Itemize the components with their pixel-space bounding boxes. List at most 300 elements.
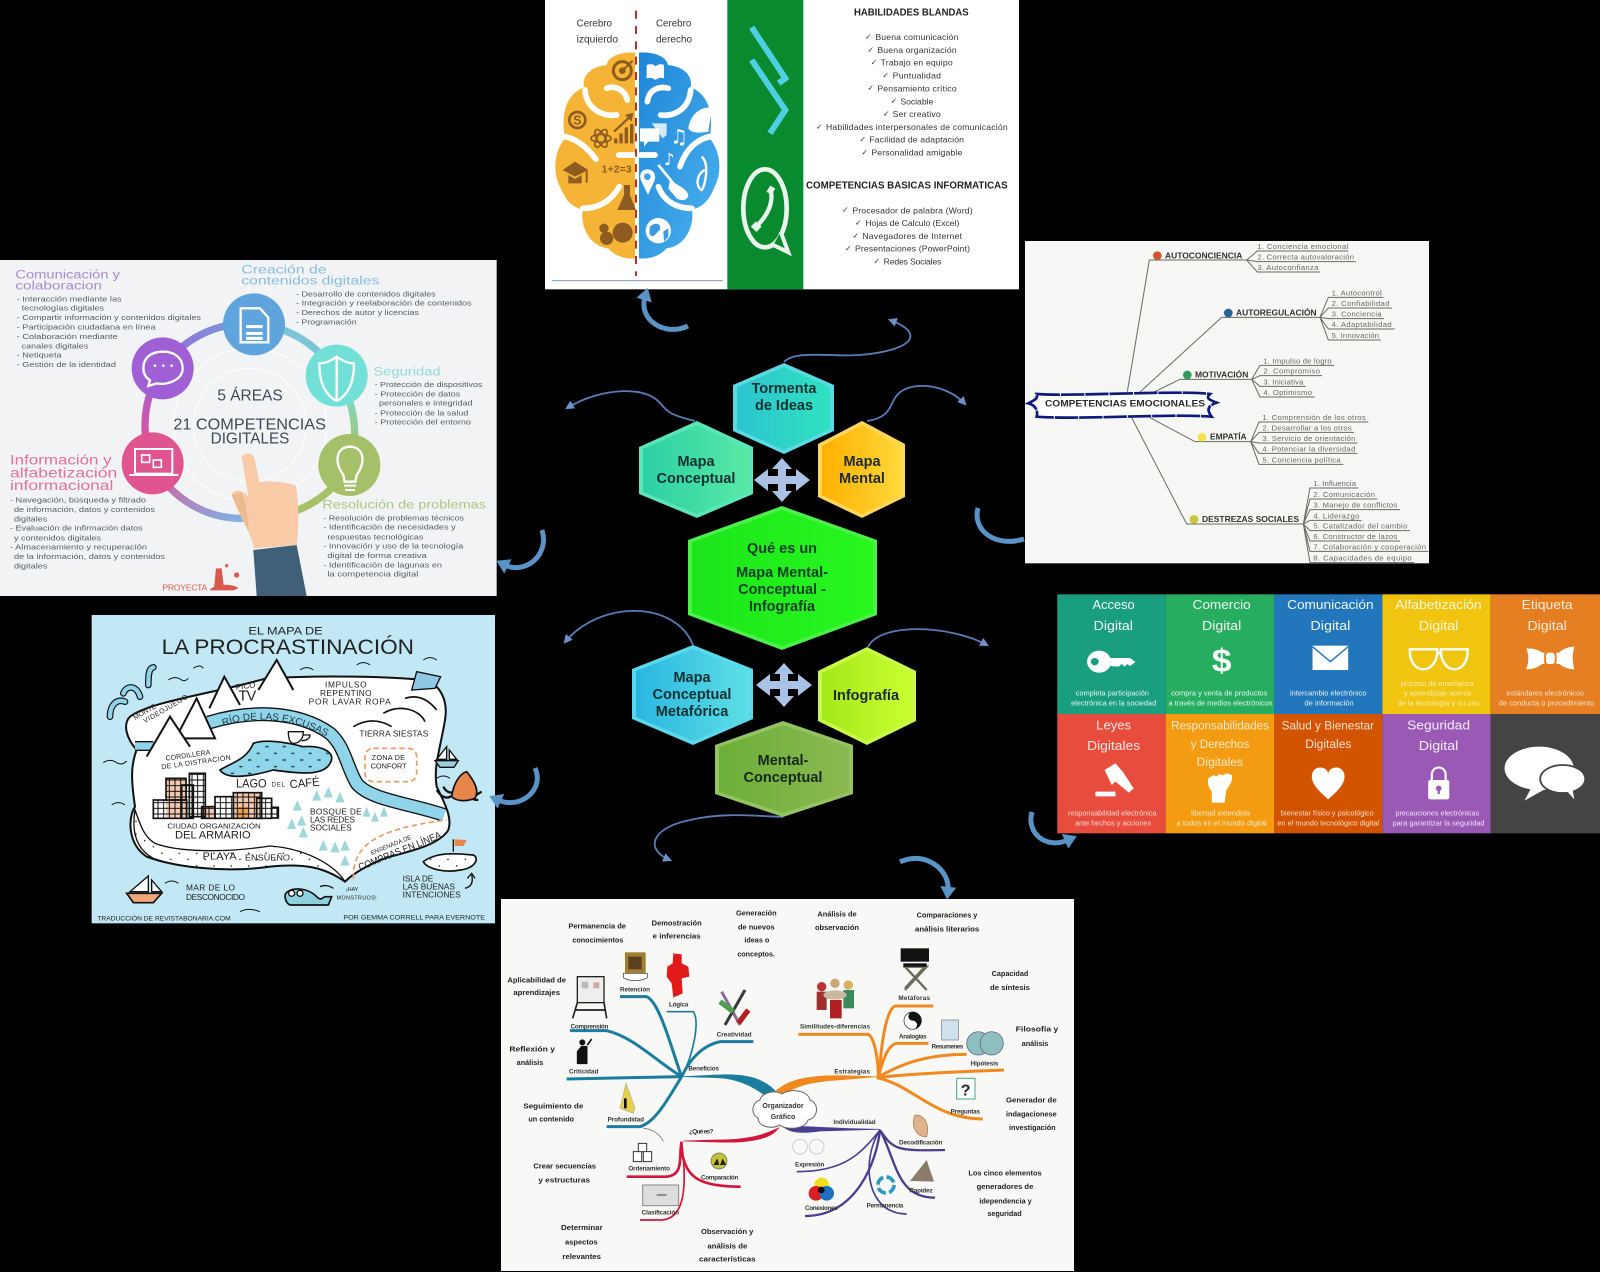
cell: responsabilidades: Digitales (1197, 755, 1243, 769)
trees (287, 787, 388, 866)
icon: brain left hemisphere: S (573, 114, 582, 128)
branch: autoconciencia: 3. Autoconfianza (1257, 263, 1319, 272)
small labels right: Resumenes (932, 1043, 964, 1050)
hexagon: infografia: Infografía (833, 688, 900, 704)
cell: etiqueta digital: Etiqueta (1522, 597, 1573, 612)
map labels: ZONA DE (372, 753, 405, 762)
small labels left: Comparación (701, 1174, 738, 1181)
icon: bulb circle (318, 434, 380, 496)
cell: seguridad digital: Digital (1419, 738, 1458, 753)
cell: etiqueta digital: de conducta o procedimiento (1499, 699, 1594, 707)
list: competencias basicas: Presentaciones (PowerPoint) (855, 244, 970, 254)
mind map left half (507, 909, 780, 1264)
labels: beneficios: Aplicabilidad de (507, 975, 566, 984)
hexagon: mapa conceptual (639, 421, 753, 518)
branch: empatia: 1. Comprensión de los otros (1262, 413, 1366, 422)
labels: estrategias: de síntesis (990, 983, 1030, 992)
cell: speech bubbles (1491, 714, 1600, 833)
list: creacion (296, 289, 472, 326)
list: habilidades blandas (816, 32, 1008, 158)
hexagon: mental-conceptual: Mental- (758, 753, 809, 769)
branch: autoconciencia: 1. Conciencia emocional (1257, 242, 1349, 251)
map labels: LAGO (236, 776, 267, 790)
labels: beneficios: y estructuras (538, 1175, 590, 1184)
list: seguridad (375, 380, 483, 427)
cell: comercio digital: Comercio (1193, 597, 1251, 612)
heading: cerebro izquierdo y derecho: derecho (656, 34, 692, 45)
list: habilidades blandas: Buena organización (877, 45, 957, 55)
branch: autoregulacion: 4. Adaptabilidad (1332, 320, 1392, 329)
cell: salud y bienestar: en el mundo tecnológico digital (1277, 819, 1379, 827)
divider: red dashed line (633, 11, 639, 276)
labels: estrategias: Análisis de (817, 910, 857, 919)
branch: motivacion: MOTIVACIÓN (1195, 369, 1248, 380)
list: habilidades blandas: ✓ (891, 97, 897, 106)
river (135, 714, 444, 815)
map labels: CIUDAD ORGANIZACIÓN (167, 822, 261, 831)
list: informacion: digitales (14, 514, 48, 523)
heading: creacion de contenidos: Creación de (241, 263, 327, 277)
labels: beneficios: relevantes (562, 1252, 601, 1261)
branch: autoregulacion (1224, 288, 1392, 340)
arrow: to left panel (505, 530, 544, 568)
arrow: to bottom mind map (900, 858, 948, 890)
cell: comunicacion digital: intercambio electrónico (1290, 689, 1366, 697)
list: habilidades blandas: Pensamiento crítico (877, 83, 957, 93)
cell: leyes digitales: Digitales (1087, 738, 1140, 753)
small labels right (795, 995, 999, 1212)
list: resolucion: - Identificación de necesidades y (323, 523, 456, 532)
branch: motivacion: 1. Impulso de logro (1263, 356, 1332, 365)
branch: destrezas sociales: 2. Comunicación (1313, 490, 1375, 499)
list: creacion: - Integración y reelaboración de contenidos (296, 299, 472, 308)
list: resolucion: - Identificación de lagunas en (323, 560, 442, 569)
cell: comercio digital: a través de medios electrónicos (1169, 699, 1273, 707)
list: habilidades blandas: ✓ (861, 148, 868, 157)
branches: beneficios (567, 997, 780, 1127)
cell: leyes digitales: responsabilidad electrónica (1068, 809, 1157, 817)
list: resolucion: digital de forma creativa (327, 551, 428, 560)
center title (173, 387, 326, 447)
branch: empatia: 5. Conciencia política (1262, 455, 1341, 464)
icons right: ? (961, 1083, 971, 1100)
cell: salud y bienestar (1274, 714, 1382, 833)
branch: motivacion (1183, 356, 1332, 397)
list: habilidades blandas: ✓ (871, 58, 877, 67)
cell: leyes digitales: Leyes (1096, 717, 1131, 732)
icon: chat circle (132, 337, 194, 399)
hexagon: que es un mapa mental conceptual infografia: Conceptual - (738, 582, 826, 598)
branch: autoregulacion: 5. Innovación (1332, 331, 1379, 340)
list: seguridad: - Protección de datos (375, 389, 461, 398)
branch lines (1127, 251, 1428, 563)
list: creacion: - Programación (296, 317, 357, 326)
cell: responsabilidades: Responsabilidades (1171, 719, 1269, 732)
cell: acceso digital: Acceso (1093, 597, 1135, 612)
cell: acceso digital: electrónica en la sociedad (1071, 699, 1156, 707)
list: comunicacion: - Participación ciudadana en línea (17, 322, 157, 331)
cell: comunicacion digital (1274, 594, 1382, 714)
list: habilidades blandas: ✓ (859, 135, 866, 144)
center title: 5 ÁREAS (217, 387, 283, 404)
branch: destrezas sociales: 7. Colaboración y cooperación (1313, 542, 1426, 551)
small labels left: Creatividad (717, 1032, 752, 1039)
list: competencias basicas: ✓ (855, 218, 862, 227)
list: habilidades blandas: ✓ (816, 122, 823, 131)
heading: cerebro izquierdo y derecho: izquierdo (577, 34, 618, 45)
banner: competencias emocionales: COMPETENCIAS EMOCIONALES (1045, 399, 1205, 409)
list: comunicacion: tecnologías digitales (22, 304, 104, 313)
heading: cerebro izquierdo y derecho (577, 19, 692, 45)
small labels right: Similitudes-diferencias (800, 1023, 870, 1030)
hexagon: mapa mental: Mapa (843, 454, 881, 470)
list: habilidades blandas: Buena comunicación (875, 32, 959, 42)
list: informacion (10, 496, 165, 570)
icon: pointing hand (232, 453, 307, 596)
list: resolucion (323, 513, 464, 579)
icon: four-way arrow top (754, 458, 810, 502)
list: habilidades blandas: Personalidad amigable (871, 148, 963, 158)
icon: organizador grafico cloud (753, 1091, 817, 1128)
labels: beneficios: e inferencias (653, 932, 701, 941)
heading: informacion: Información y (10, 452, 112, 467)
cell: alfabetizacion digital: de la tecnología y su uso (1398, 699, 1479, 707)
hexagon: mapa conceptual metaforica: Metafórica (656, 704, 729, 720)
icon: four-way arrow bottom (756, 663, 812, 707)
icon: whale (285, 886, 333, 905)
branch: destrezas sociales: 3. Manejo de conflictos (1313, 501, 1398, 510)
labels: estrategias: generadores de (977, 1182, 1033, 1191)
map labels: IMPULSO (325, 679, 367, 689)
small labels right: Analogías (899, 1033, 927, 1040)
hexagon: tormenta de ideas: de Ideas (755, 398, 813, 414)
icon: brain right hemisphere: ♫ (670, 124, 688, 148)
branch: empatia: EMPATÍA (1210, 431, 1247, 441)
green strip (727, 0, 803, 289)
labels: beneficios: Determinar (561, 1223, 603, 1232)
heading: comunicacion y colaboracion (15, 267, 121, 292)
map labels: TRADUCCIÓN DE REVISTABONARIA.COM (97, 914, 231, 923)
labels: estrategias: análisis literarios (915, 925, 979, 934)
hexagon: mapa conceptual: Conceptual (657, 471, 735, 487)
cell: comunicacion digital: Digital (1310, 618, 1350, 633)
labels: beneficios: aspectos (565, 1237, 598, 1246)
icons right (793, 948, 1003, 1201)
map labels: DEL (272, 783, 286, 789)
map labels: ISLA DE (403, 874, 434, 884)
cell: responsabilidades: libertad extendida (1191, 809, 1251, 817)
labels: beneficios: de nuevos (738, 922, 775, 931)
heading: creacion de contenidos (241, 263, 379, 288)
small labels right: Individualidad (833, 1119, 876, 1126)
labels: beneficios (507, 909, 777, 1264)
cell: responsabilidades (1166, 714, 1274, 833)
labels: beneficios: Observación y (701, 1227, 754, 1236)
icon: organizador grafico cloud: Gráfico (771, 1114, 795, 1121)
cell: leyes digitales (1057, 714, 1166, 833)
small labels left (569, 987, 752, 1216)
labels: beneficios: conceptos. (737, 950, 775, 959)
map labels: PICO (235, 680, 256, 692)
connector: mapa mental arrow (867, 386, 965, 421)
list: informacion: digitales (14, 561, 48, 570)
title: EL MAPA DE (248, 625, 323, 637)
icon: cyan chevrons (752, 27, 785, 133)
small labels left: Criticidad (569, 1068, 598, 1075)
cup (288, 732, 310, 743)
hexagon: que es un mapa mental conceptual infografia (688, 506, 877, 650)
labels: beneficios: Permanencia de (568, 921, 626, 930)
map labels: SOCIALES (310, 823, 352, 833)
arrow: to digital grid (1031, 812, 1068, 843)
connector: mapa conceptual arrow (567, 391, 695, 421)
cell: responsabilidades: y Derechos (1191, 737, 1249, 751)
city (153, 773, 278, 818)
list: habilidades blandas: ✓ (865, 32, 872, 41)
icon: whatsapp (743, 169, 788, 252)
labels: estrategias: Filosofía y (1016, 1025, 1059, 1034)
small labels right: Estrategias (834, 1068, 870, 1075)
list: competencias basicas: Navegadores de Internet (862, 231, 963, 241)
list: comunicacion: - Compartir información y contenidos digitales (17, 313, 201, 322)
mountains (147, 660, 293, 757)
map labels (97, 679, 485, 923)
flag (412, 672, 441, 690)
heading: informacion: informacional (10, 478, 113, 493)
map labels: ENSENADA DE (370, 835, 413, 857)
heading: resolucion de problemas: Resolución de problemas (322, 497, 486, 511)
branch: autoregulacion: 3. Conciencia (1332, 310, 1382, 319)
list: comunicacion: - Interacción mediante las (17, 294, 122, 303)
cell: seguridad digital: Seguridad (1407, 717, 1470, 732)
center title: DIGITALES (211, 430, 289, 447)
labels: beneficios: conocimientos (572, 936, 623, 945)
map labels: TV (238, 689, 257, 705)
list: habilidades blandas: ✓ (883, 109, 890, 118)
branch: empatia: 2. Desarrollar a los otros (1262, 423, 1352, 432)
cell: alfabetizacion digital: y aprendizaje acerca (1404, 689, 1472, 698)
connector: metaforica arrow (565, 611, 693, 645)
map labels: LAS BUENAS (403, 881, 455, 891)
map labels: TIERRA SIESTAS (359, 729, 429, 739)
panel: habilidades blandas y cerebro (545, 0, 1019, 289)
list: seguridad: personales e integridad (379, 399, 473, 408)
hexagon: mapa mental: Mental (839, 471, 885, 487)
icon: island of good intentions (423, 839, 476, 888)
list: competencias basicas: Redes Sociales (884, 257, 942, 267)
icon: sailboats (127, 747, 458, 903)
cell: comunicacion digital: de información (1305, 699, 1354, 707)
branch: autoregulacion: AUTOREGULACIÓN (1236, 306, 1317, 317)
list: informacion: y contenidos digitales (14, 533, 101, 542)
small labels right: Conexiones (805, 1205, 838, 1212)
cell: etiqueta digital (1491, 594, 1600, 714)
list: habilidades blandas: Trabajo en equipo (881, 58, 953, 68)
branches: individualidad (783, 1126, 945, 1216)
hexagon: tormenta de ideas: Tormenta (752, 381, 817, 397)
icon: brain left hemisphere: 1+2=3 (602, 164, 632, 175)
list: creacion: - Desarrollo de contenidos digitales (296, 289, 436, 298)
hexagon: mental-conceptual: Conceptual (744, 770, 822, 786)
cell: acceso digital (1057, 594, 1166, 714)
map labels: DEL ARMARIO (175, 829, 251, 841)
connector: tormenta arrow (784, 320, 910, 362)
title (162, 625, 414, 659)
map: island (126, 660, 450, 882)
small labels left: Comprensión (571, 1023, 608, 1030)
icon: octopus (437, 772, 482, 801)
list: competencias basicas: ✓ (852, 231, 859, 240)
labels: estrategias: observación (815, 923, 859, 932)
hexagon: mental-conceptual (715, 721, 853, 817)
hexagon: mapa conceptual metaforica: Mapa (673, 670, 711, 686)
logo: proyecta: PROYECTA (162, 582, 208, 592)
branch: destrezas sociales: 8. Capacidades de equipo (1313, 554, 1412, 563)
list: habilidades blandas: Habilidades interpersonales de comunicación (826, 122, 1008, 132)
small labels right: Rapidez (909, 1187, 933, 1194)
list: competencias basicas: Hojas de Calculo (Excel) (865, 218, 959, 228)
mind map right half (770, 910, 1059, 1218)
connector: mental-conceptual arrow (655, 815, 783, 860)
heading: comunicacion y colaboracion: colaboracion (15, 278, 102, 292)
icon: document circle (223, 293, 285, 355)
heading: competencias basicas informaticas: COMPETENCIAS BASICAS INFORMATICAS (806, 180, 1008, 191)
cell: salud y bienestar: Salud y Bienestar (1282, 719, 1374, 732)
labels: estrategias: Comparaciones y (917, 911, 978, 920)
labels: beneficios: un contenido (528, 1115, 574, 1124)
list: resolucion: - Innovación y uso de la tecnología (323, 542, 464, 551)
labels: estrategias: Capacidad (992, 969, 1029, 978)
labels: beneficios: características (699, 1255, 756, 1264)
lake (220, 741, 332, 776)
branch: autoconciencia (1153, 242, 1354, 272)
small labels right: Expresión (795, 1162, 824, 1169)
labels: beneficios: aprendizajes (513, 988, 560, 997)
ensenada dashed (353, 820, 447, 878)
heading: creacion de contenidos: contenidos digitales (241, 274, 379, 288)
zona de confort (365, 748, 417, 782)
icon: brain right hemisphere (639, 53, 719, 259)
labels: estrategias (815, 910, 1059, 1218)
cell: acceso digital: completa participación (1076, 689, 1149, 697)
list: comunicacion: - Colaboración mediante (17, 332, 118, 341)
heading: informacion (10, 452, 117, 493)
hexagon: mapa conceptual: Mapa (677, 454, 715, 470)
map labels: MONTE (132, 703, 158, 722)
labels: beneficios: Seguimiento de (523, 1101, 583, 1110)
cell: alfabetizacion digital: Digital (1419, 618, 1458, 633)
arrow: to top panel (644, 297, 688, 329)
branch: empatia: 3. Servicio de orientación (1262, 434, 1355, 443)
list: habilidades blandas: ✓ (867, 45, 874, 54)
small labels left: Lógica (669, 1001, 689, 1008)
arrow: to procrastination map (498, 768, 537, 803)
panel: competencias emocionales (1025, 241, 1429, 563)
cell: comercio digital (1166, 594, 1274, 714)
heading: habilidades blandas: HABILIDADES BLANDAS (854, 7, 969, 18)
branch: motivacion: 2. Compromiso (1263, 367, 1320, 376)
small labels left: Retención (620, 987, 650, 994)
title: LA PROCRASTINACIÓN (162, 634, 414, 659)
icon: organizador grafico cloud: Organizador (762, 1103, 804, 1110)
icon: brain right hemisphere: ♪ (664, 150, 675, 169)
icon: sea serpent (110, 667, 153, 717)
branch: destrezas sociales: DESTREZAS SOCIALES (1202, 514, 1299, 524)
branch: empatia: 4. Potenciar la diversidad (1262, 444, 1355, 453)
small labels right: Permanencia (867, 1203, 904, 1210)
panel: organizador grafico mind map (501, 899, 1074, 1271)
cell: leyes digitales: ante hechos y acciones (1075, 819, 1151, 827)
heading: seguridad: Seguridad (373, 365, 441, 379)
labels: estrategias: Generador de (1006, 1095, 1057, 1104)
hexagon: infografia (818, 647, 916, 745)
cell: salud y bienestar: bienestar físico y psicológico (1281, 809, 1374, 817)
map labels: POR LAVAR ROPA (309, 696, 391, 706)
chart: ring of five areas (122, 293, 380, 518)
small labels right: Metáforas (898, 995, 930, 1002)
labels: estrategias: investigación (1009, 1123, 1056, 1132)
branch: motivacion: 3. Iniciativa (1263, 377, 1304, 386)
icons left (573, 952, 748, 1206)
list: habilidades blandas: ✓ (882, 71, 889, 80)
branch: autoregulacion: 1. Autocontrol (1332, 288, 1382, 297)
small labels right: Hipótesis (971, 1061, 999, 1068)
map labels: PLAYA (203, 851, 237, 862)
map labels: DE LA DISTRACIÓN (161, 753, 231, 771)
icon: laptop circle (122, 432, 184, 494)
list: competencias basicas: ✓ (845, 244, 852, 253)
cell: seguridad digital: precauciones electrónicas (1395, 809, 1479, 817)
list: competencias basicas (842, 205, 973, 267)
hills (353, 697, 437, 727)
list: seguridad: - Protección de dispositivos (375, 380, 483, 389)
heading: cerebro izquierdo y derecho: Cerebro (577, 19, 612, 30)
map labels: DESCONOCIDO (186, 892, 246, 902)
panel: 5 areas 21 competencias digitales (0, 260, 497, 596)
banner: competencias emocionales (1028, 393, 1217, 418)
map labels: CONFORT (371, 761, 407, 770)
heading: cerebro izquierdo y derecho: Cerebro (656, 19, 692, 30)
cell: acceso digital: Digital (1094, 618, 1133, 633)
chart: central hexagon diagram (565, 320, 987, 860)
list: comunicacion: canales digitales (22, 341, 89, 350)
branch: autoconciencia: AUTOCONCIENCIA (1165, 250, 1242, 260)
list: informacion: - Almacenamiento y recuperación (10, 543, 147, 552)
list: comunicacion: - Gestión de la identidad (17, 360, 116, 369)
small labels left: Clasificación (642, 1209, 679, 1216)
list: resolucion: la competencia digital (327, 570, 419, 579)
map labels: REPENTINO (320, 688, 372, 698)
map labels: MONSTRUOS! (337, 895, 377, 901)
small labels right: Decodificación (899, 1139, 942, 1146)
list: habilidades blandas: Puntualidad (893, 71, 941, 81)
small labels left: ¿Qué es? (689, 1129, 713, 1136)
map labels: INTENCIONES (403, 889, 461, 899)
map labels: CORDILLERA (165, 749, 211, 763)
map labels: ENSUEÑO (245, 853, 291, 863)
cell: responsabilidades: a todos en el mundo digital (1177, 819, 1267, 827)
map labels: COMPRAS EN LÍNEA (356, 828, 443, 873)
map labels: RÍO DE LAS EXCUSAS (222, 712, 328, 736)
list: competencias basicas: ✓ (842, 206, 849, 215)
map labels: BOSQUE DE (310, 806, 362, 816)
small labels left: Beneficios (688, 1066, 719, 1073)
panel: ciudadania digital grid (1057, 594, 1600, 833)
labels: beneficios: Crear secuencias (533, 1161, 596, 1170)
cell: alfabetizacion digital: Alfabetización (1395, 597, 1482, 612)
labels: beneficios: análisis (517, 1058, 543, 1067)
list: resolucion: - Resolución de problemas técnicos (323, 513, 464, 522)
